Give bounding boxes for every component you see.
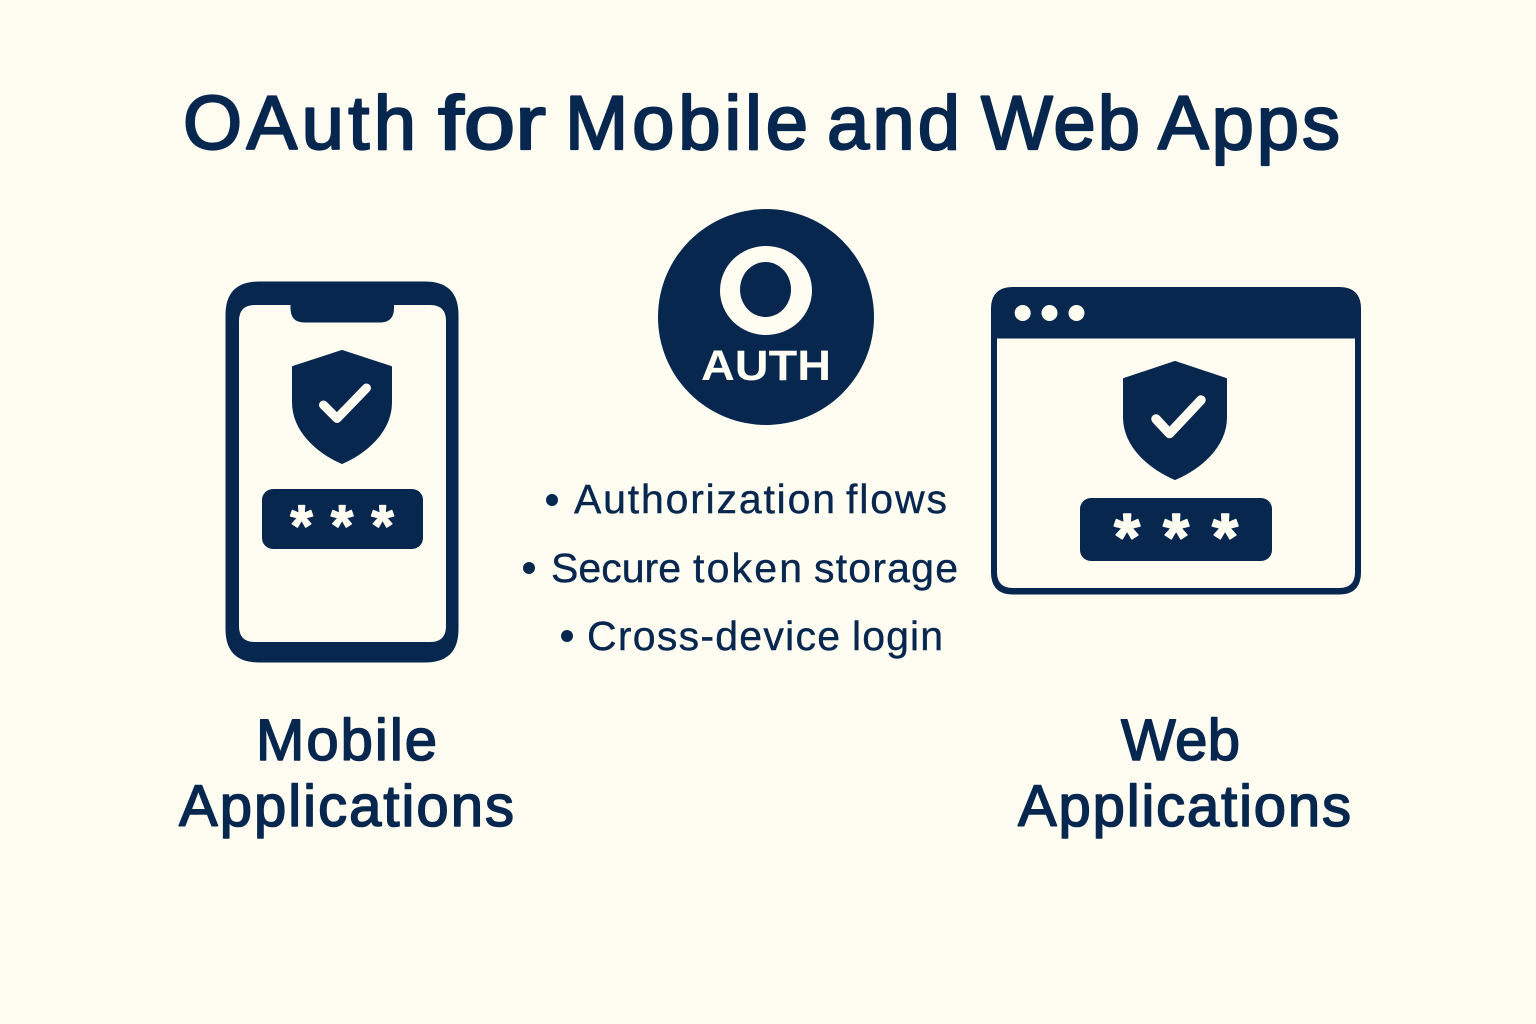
bullet: Authorization flows: Authorization xyxy=(574,476,835,522)
web password field: * xyxy=(1163,500,1190,575)
title: OAuth xyxy=(183,81,416,166)
bullet: Authorization flows xyxy=(546,476,947,522)
label: Mobile Applications: Applications xyxy=(179,774,514,839)
bullet: Secure token storage: token xyxy=(693,545,802,591)
icon: browser window xyxy=(991,287,1361,594)
bullet: Cross-device login: login xyxy=(852,613,943,659)
bullet: Secure token storage: storage xyxy=(814,545,958,591)
label: Web Applications: Applications xyxy=(1018,774,1351,839)
bullet: Secure token storage xyxy=(523,545,958,591)
icon: OAuth badge: AUTH xyxy=(701,342,831,390)
icon: mobile phone xyxy=(226,282,458,662)
icon: OAuth badge xyxy=(658,209,874,425)
title: and xyxy=(827,81,960,166)
label: Mobile Applications: Mobile xyxy=(256,708,437,773)
mobile password field: * xyxy=(371,494,394,559)
title: Apps xyxy=(1158,81,1340,166)
mobile password field: * xyxy=(290,494,313,559)
bullet: Cross-device login: Cross-device xyxy=(587,613,840,659)
icon: web shield xyxy=(1124,362,1226,479)
title xyxy=(183,81,1340,166)
title: for xyxy=(438,81,546,166)
web password field: * xyxy=(1114,500,1141,575)
bullet: Secure token storage: Secure xyxy=(551,545,681,591)
icon: mobile shield xyxy=(293,351,391,463)
bullet: Cross-device login xyxy=(561,613,943,659)
mobile password field: * xyxy=(331,494,354,559)
label: Web Applications xyxy=(1018,708,1351,839)
bullet list xyxy=(523,476,958,659)
web password field xyxy=(1080,498,1272,575)
title: Mobile xyxy=(565,81,808,166)
title: Web xyxy=(981,81,1140,166)
bullet: Authorization flows: flows xyxy=(846,476,947,522)
label: Mobile Applications xyxy=(179,708,514,839)
mobile password field xyxy=(262,489,423,559)
web password field: * xyxy=(1212,500,1239,575)
label: Web Applications: Web xyxy=(1121,708,1240,773)
